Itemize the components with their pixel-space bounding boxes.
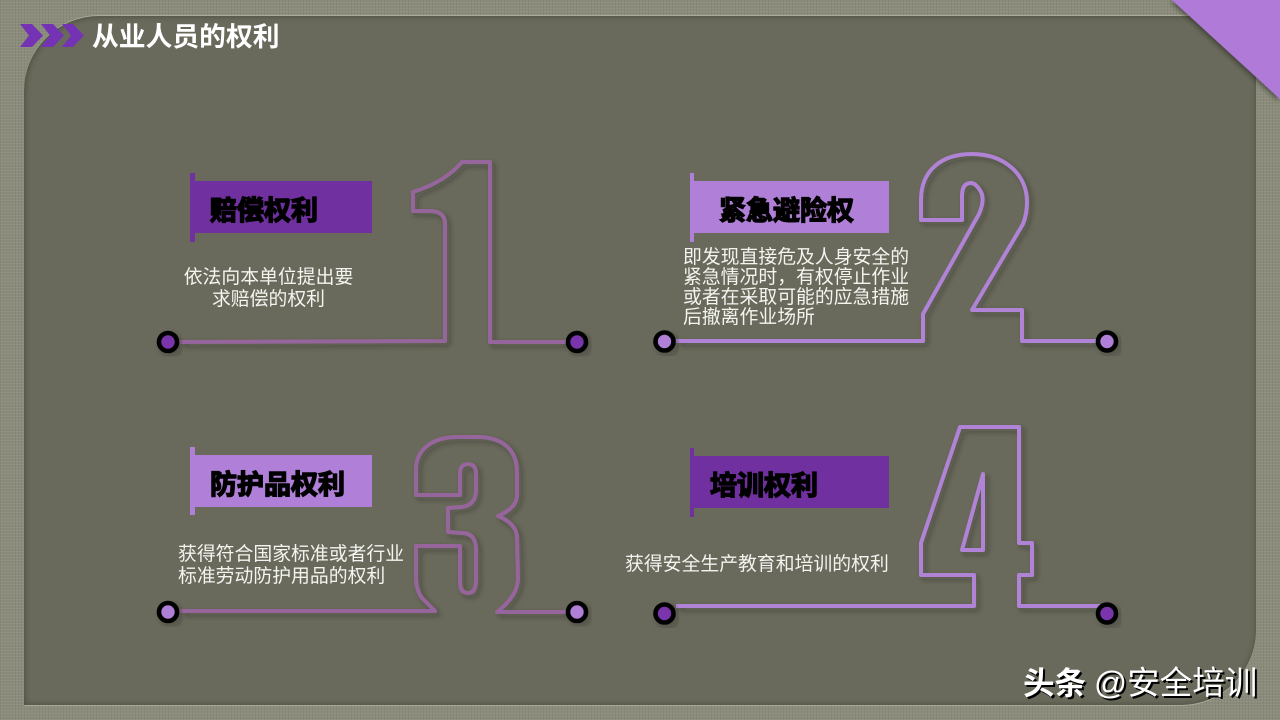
label: 培训权利	[690, 448, 889, 517]
right node 1	[568, 333, 586, 351]
description 1: 求赔偿的权利	[212, 288, 325, 309]
number 4 outline	[676, 427, 1100, 606]
panel: 紧急避险权	[656, 154, 1116, 350]
left node 4	[656, 604, 674, 622]
description 3: 获得符合国家标准或者行业	[178, 543, 404, 564]
panel: 培训权利	[625, 427, 1116, 622]
description 4: 获得安全生产教育和培训的权利	[625, 553, 889, 574]
watermark: 头条	[1023, 665, 1086, 701]
left node 3	[159, 603, 177, 621]
watermark: @安全培训	[1094, 664, 1257, 701]
label: 紧急避险权: 紧急避险权	[719, 195, 854, 226]
label: 赔偿权利: 赔偿权利	[210, 196, 318, 226]
description 2: 即发现直接危及人身安全的	[683, 246, 909, 267]
label: 防护品权利	[190, 447, 372, 515]
description 1: 依法向本单位提出要	[184, 266, 353, 287]
title: 从业人员的权利	[92, 22, 280, 52]
number 3 outline	[180, 437, 566, 612]
watermark: @安全培训	[1096, 666, 1259, 703]
right node 3	[568, 603, 586, 621]
corner triangle	[1172, 0, 1280, 99]
panel: 赔偿权利	[159, 162, 586, 351]
label: 培训权利: 培训权利	[710, 471, 818, 501]
label: 赔偿权利	[190, 173, 372, 242]
label: 防护品权利: 防护品权利	[210, 470, 345, 500]
right node 2	[1098, 332, 1116, 350]
left node 2	[656, 332, 674, 350]
number 2 outline	[676, 154, 1096, 341]
left node 1	[159, 333, 177, 351]
number 1 outline	[180, 162, 566, 342]
icon: chevrons	[20, 24, 84, 47]
watermark: 头条	[1025, 667, 1088, 703]
description 3: 标准劳动防护用品的权利	[178, 565, 385, 586]
description 2: 或者在采取可能的应急措施	[683, 286, 909, 307]
watermark	[1023, 664, 1259, 703]
right node 4	[1098, 604, 1116, 622]
description 2: 后撤离作业场所	[683, 306, 815, 327]
panel: 防护品权利	[159, 437, 586, 621]
description 2: 紧急情况时，有权停止作业	[683, 266, 909, 287]
label: 紧急避险权	[690, 173, 889, 242]
